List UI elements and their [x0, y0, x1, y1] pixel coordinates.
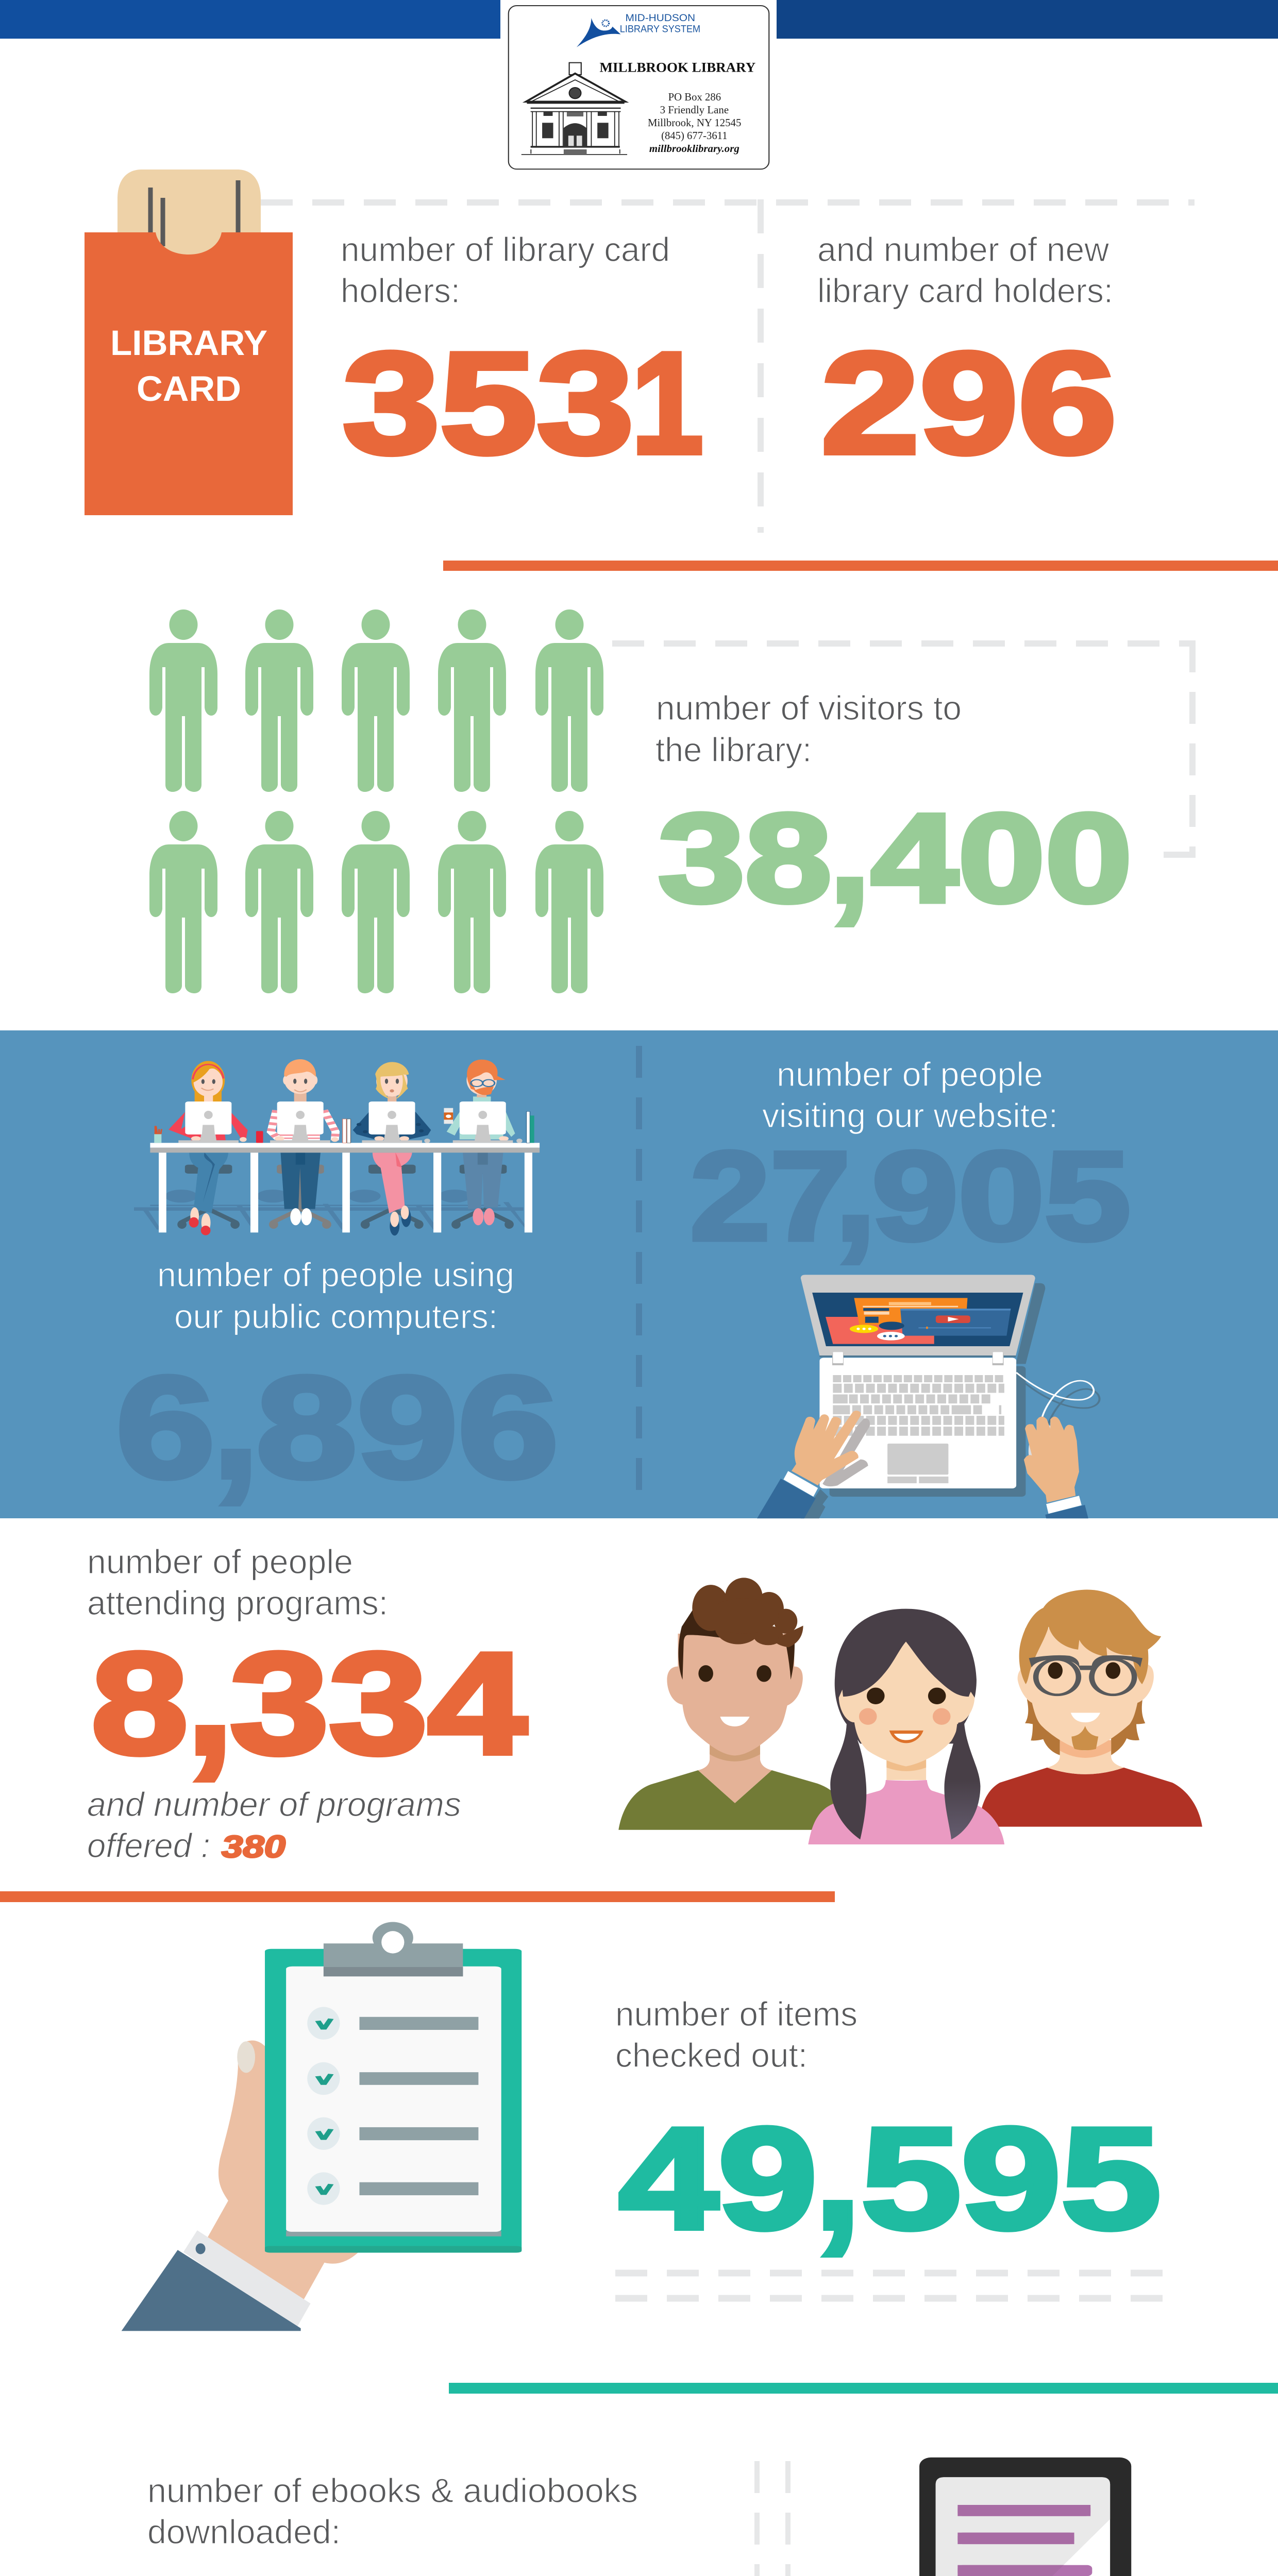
panel: computers and website — [0, 1030, 1278, 1518]
illustration: three smiling people — [618, 1578, 1202, 1844]
text: website label: visiting our website: — [762, 1096, 1058, 1134]
section: ebooks and audiobooks — [147, 2458, 1131, 2576]
number: 49,595: 49 — [619, 2098, 817, 2259]
text: items label: checked out: — [615, 2036, 808, 2074]
number: 6,896: 6 — [116, 1347, 215, 1508]
icon: e-reader tablet — [919, 2458, 1131, 2576]
library business card logo: LIBRARY SYSTEM — [620, 24, 700, 35]
number: 49,595: 595 — [861, 2098, 1161, 2259]
illustration: hand holding clipboard — [122, 1922, 522, 2331]
text: website label: number of people — [777, 1055, 1043, 1093]
library business card logo: PO Box 286 — [668, 91, 721, 103]
text: ebooks label: number of ebooks & audiobooks — [147, 2471, 638, 2510]
number: 38,400: 400 — [871, 787, 1132, 928]
number: 8,334: , — [186, 1597, 234, 1790]
text: programs offered: offered : — [87, 1826, 210, 1865]
icon: library card in sleeve: CARD — [137, 369, 241, 409]
text: ebooks label: downloaded: — [147, 2513, 341, 2551]
library business card logo: 3 Friendly Lane — [660, 104, 729, 116]
number: 296: 296 — [821, 323, 1117, 484]
number: 38,400: 38 — [658, 787, 832, 928]
text: programs offered: and number of programs — [87, 1785, 461, 1823]
number: 27,905: 27 — [690, 1125, 850, 1266]
number: 3531: 353 — [343, 323, 634, 484]
text: items label: number of items — [615, 1995, 857, 2033]
number: 6,896: , — [212, 1321, 260, 1514]
number: 6,896: 896 — [256, 1347, 559, 1508]
library business card logo: millbrooklibrary.org — [649, 144, 739, 155]
section: programs — [87, 1543, 1202, 1865]
text: card holders label: holders: — [341, 272, 460, 310]
text: visitors label: the library: — [655, 731, 812, 769]
number: 8,334: 334 — [230, 1623, 528, 1784]
number: 8,334: 8 — [91, 1623, 188, 1784]
text: programs label: number of people — [87, 1543, 353, 1581]
icon: ten visitor figures — [149, 609, 603, 993]
section: visitors — [149, 609, 1196, 993]
text: card holders label: number of library card — [341, 230, 670, 268]
library business card logo: MILLBROOK LIBRARY — [599, 59, 755, 75]
text: public computers label: our public computers: — [174, 1297, 498, 1335]
section: items checked out — [122, 1922, 1163, 2331]
icon: library card in sleeve: LIBRARY — [110, 323, 267, 363]
library business card logo — [509, 6, 769, 169]
number: 49,595: , — [814, 2072, 862, 2265]
text: public computers label: number of people using — [157, 1256, 514, 1294]
text: visitors label: number of visitors to — [656, 689, 962, 727]
number: 38,400: , — [829, 765, 871, 934]
library business card logo: Millbrook, NY 12545 — [648, 117, 741, 129]
text: new card holders label: and number of new — [817, 230, 1109, 268]
library business card logo: MID-HUDSON — [625, 13, 695, 24]
text: programs label: attending programs: — [87, 1584, 388, 1622]
section: library card holders — [85, 170, 1195, 533]
number: 3531: 1 — [631, 323, 703, 484]
text: new card holders label: library card holders: — [817, 272, 1113, 310]
text: programs offered: 380 — [222, 1829, 285, 1864]
illustration: people at public computers — [134, 1059, 540, 1235]
number: 27,905: 905 — [872, 1125, 1131, 1266]
library business card logo: (845) 677-3611 — [661, 130, 728, 142]
icon: library card in sleeve — [85, 170, 293, 515]
number: 27,905: , — [834, 1103, 877, 1272]
header bar — [0, 0, 1278, 39]
illustration: laptop with hands — [757, 1275, 1100, 1518]
